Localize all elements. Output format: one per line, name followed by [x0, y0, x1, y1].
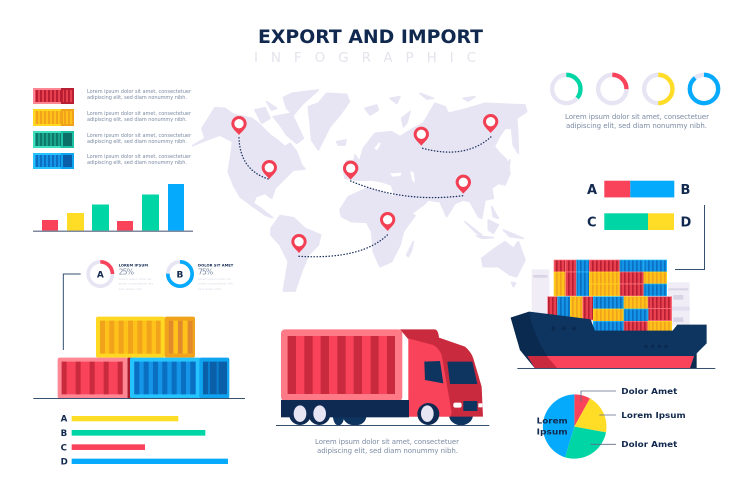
pie labels: [537, 386, 686, 449]
donut B label: sed diam nibh: [198, 287, 221, 291]
callout line: containers: [63, 274, 81, 350]
legend row: green: Lorem ipsum dolor sit amet, consectetuer: [87, 133, 192, 139]
legend: container colours: [33, 88, 192, 169]
donut caption: adipiscing elit, sed diam nonummy nibh.: [566, 122, 707, 130]
horizontal bars: A: [61, 415, 68, 425]
stacked bars A B C D: [587, 181, 692, 230]
legend row: red: Lorem ipsum dolor sit amet, consectetuer: [87, 89, 192, 95]
donut B: B: [177, 271, 184, 281]
cargo: [548, 260, 672, 331]
stacked bars A B C D: D: [680, 216, 692, 230]
donut A label: Lorem ipsum dolor sit: [119, 277, 152, 281]
legend row: blue: Lorem ipsum dolor sit amet, consectetuer: [87, 154, 192, 160]
yellow container: [96, 317, 195, 358]
cab: [400, 329, 483, 417]
pie labels: Lorem Ipsum: [621, 410, 686, 420]
eurasia africa australia: [340, 93, 527, 287]
world map: [193, 90, 527, 291]
donut row: [552, 75, 718, 103]
horizontal bars: C: [61, 443, 67, 453]
horizontal bars: [61, 415, 228, 468]
donut yellow: [644, 75, 672, 103]
hull: [511, 312, 707, 368]
donut A label: amet consectetuer elit: [119, 282, 154, 286]
horizontal bars: D: [61, 458, 68, 468]
ship: [511, 260, 715, 369]
truck caption: [315, 438, 459, 455]
stacked containers: [33, 262, 245, 468]
subtitle: INFOGRAPHIC: [254, 50, 476, 66]
chassis: [281, 400, 409, 417]
pie labels: Dolor Amet: [621, 439, 677, 449]
superstructure: [532, 269, 690, 326]
donut B: [168, 262, 192, 286]
legend row: blue: [33, 153, 192, 169]
donut B label: DOLOR SIT AMET: [198, 263, 234, 267]
donut B label: Lorem ipsum dolor sit: [198, 277, 231, 281]
donut caption: Lorem ipsum dolor sit amet, consectetuer: [565, 113, 709, 121]
callout line: ship: [675, 205, 704, 270]
cargo box: [281, 329, 402, 401]
map pins: [231, 114, 498, 253]
donut green: [552, 75, 580, 103]
donut blue: [690, 75, 718, 103]
legend row: green: [33, 131, 192, 148]
stacked bars A B C D: C: [587, 216, 597, 230]
truck caption: adipiscing elit, sed diam nonummy nibh.: [317, 447, 458, 455]
route lines: [239, 136, 492, 257]
horizontal bars: B: [61, 429, 67, 439]
pie labels: Lorem: [537, 416, 568, 426]
red container: [58, 358, 131, 398]
truck caption: Lorem ipsum dolor sit amet, consectetuer: [315, 438, 459, 446]
legend row: yellow: Lorem ipsum dolor sit amet, consectetuer: [87, 111, 192, 117]
donut A label: LOREM IPSUM: [119, 263, 148, 267]
pie chart: [537, 386, 686, 459]
stacked bars A B C D: A: [587, 183, 597, 198]
legend row: red: [33, 88, 192, 104]
title: EXPORT AND IMPORT: [258, 26, 483, 48]
legend row: yellow: [33, 109, 192, 126]
inland seas: [374, 142, 415, 183]
donut A label: [119, 263, 154, 291]
hidden wheels: [333, 405, 473, 425]
stacked bars A B C D: B: [680, 183, 690, 198]
legend row: blue: adipiscing elit, sed diam nonummy nibh.: [87, 160, 187, 166]
donut B label: 75%: [198, 268, 213, 277]
americas and greenland: [193, 90, 349, 291]
legend row: green: adipiscing elit, sed diam nonummy nibh.: [87, 139, 187, 145]
blue container: [130, 358, 229, 398]
pie labels: Ipsum: [537, 427, 568, 437]
donut A: [88, 262, 112, 286]
wheels: [289, 403, 311, 425]
pie labels: Dolor Amet: [621, 386, 677, 396]
donut caption: [565, 113, 709, 130]
legend row: yellow: adipiscing elit, sed diam nonummy nibh.: [87, 117, 187, 123]
truck: [276, 329, 489, 426]
bar chart: [33, 184, 193, 232]
legend row: red: adipiscing elit, sed diam nonummy nibh.: [87, 95, 187, 101]
donut A label: sed diam nibh: [119, 287, 142, 291]
donut A: A: [97, 271, 104, 281]
donut B label: [198, 263, 234, 291]
donut red: [598, 75, 626, 103]
donut A label: 25%: [119, 268, 134, 277]
pie leader lines: [581, 391, 616, 444]
donut B label: amet consectetuer elit: [198, 282, 233, 286]
